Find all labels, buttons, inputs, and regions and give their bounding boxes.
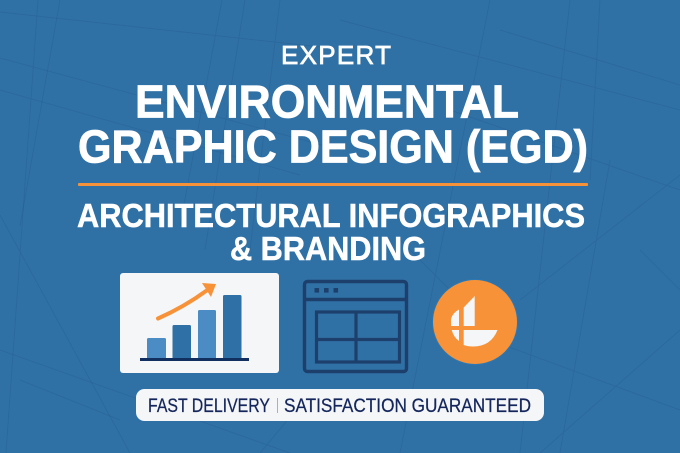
title: Environmental Graphic Design (EGD): ENVIRONMENTAL xyxy=(135,76,519,128)
arrow: upward trend xyxy=(158,283,216,318)
badge: delivery and satisfaction: FAST DELIVERY xyxy=(148,396,270,417)
subtitle: Architectural Infographics and Branding: ARCHITECTURAL INFOGRAPHICS xyxy=(77,197,585,234)
chart baseline xyxy=(140,358,249,361)
title: Environmental Graphic Design (EGD): GRAPHIC DESIGN (EGD) xyxy=(78,120,588,172)
title: Environmental Graphic Design (EGD) xyxy=(78,76,588,172)
badge: delivery and satisfaction xyxy=(136,389,544,421)
subtitle: Architectural Infographics and Branding: & BRANDING xyxy=(230,230,426,267)
divider xyxy=(78,183,588,186)
icon: growth bar chart card xyxy=(120,273,279,373)
eyebrow: EXPERT: EXPERT xyxy=(281,40,391,70)
bars xyxy=(147,295,242,359)
badge: delivery and satisfaction: SATISFACTION GUARANTEED xyxy=(284,396,531,417)
icon: browser layout wireframe xyxy=(304,282,406,372)
icon: orange sailboat logo xyxy=(432,280,518,364)
subtitle: Architectural Infographics and Branding xyxy=(77,197,585,267)
